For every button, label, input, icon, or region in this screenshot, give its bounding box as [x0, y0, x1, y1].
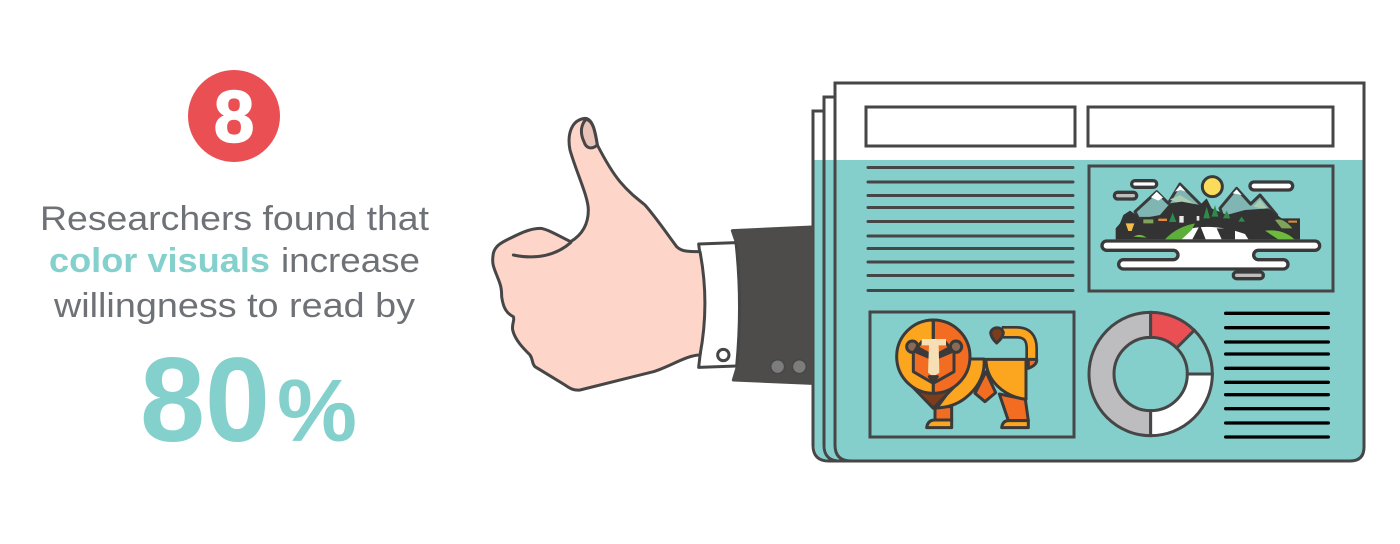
body	[986, 359, 1026, 399]
illustration: lion	[897, 320, 1037, 428]
back page	[813, 111, 860, 461]
teal segment	[1177, 330, 1212, 374]
back leg	[999, 394, 1028, 428]
cloud bank	[1102, 241, 1320, 269]
red segment	[1151, 312, 1194, 348]
statistic 80%: %	[277, 361, 357, 460]
thumbnail	[581, 119, 597, 148]
mountains	[1135, 184, 1277, 223]
chest	[937, 359, 984, 408]
documents stack	[813, 83, 1364, 461]
body text	[40, 200, 430, 325]
white segment	[1151, 374, 1212, 436]
illustration: donut chart	[1089, 312, 1212, 436]
sun	[1202, 177, 1222, 197]
statistic 80%	[140, 333, 357, 467]
small grey cloud	[1233, 272, 1263, 279]
face	[907, 339, 962, 383]
statistic 80%: 80	[140, 333, 270, 467]
front page	[835, 83, 1364, 461]
belly	[975, 372, 996, 402]
number badge	[188, 70, 280, 162]
hill	[1165, 223, 1297, 242]
sleeve	[732, 227, 812, 383]
town	[1116, 198, 1300, 239]
number badge: 8	[214, 77, 254, 158]
body text: willingness to read by	[53, 287, 415, 325]
illustration: thumbs-up hand	[493, 118, 812, 390]
lion panel	[870, 312, 1074, 437]
landscape panel	[1089, 166, 1333, 291]
hand	[493, 118, 705, 390]
tail	[991, 328, 1037, 368]
body text: Researchers found that	[40, 200, 430, 238]
text lines column	[868, 168, 1073, 290]
illustration: landscape	[1102, 177, 1320, 279]
body text: increase	[281, 242, 420, 280]
cuff	[699, 243, 740, 367]
middle page	[824, 97, 870, 461]
black text lines	[1226, 313, 1328, 437]
grey segment	[1089, 312, 1151, 436]
front leg	[927, 407, 952, 428]
mane	[897, 320, 970, 408]
body text: color visuals	[49, 242, 270, 280]
clouds upper	[1114, 181, 1293, 199]
headline boxes	[866, 107, 1333, 146]
